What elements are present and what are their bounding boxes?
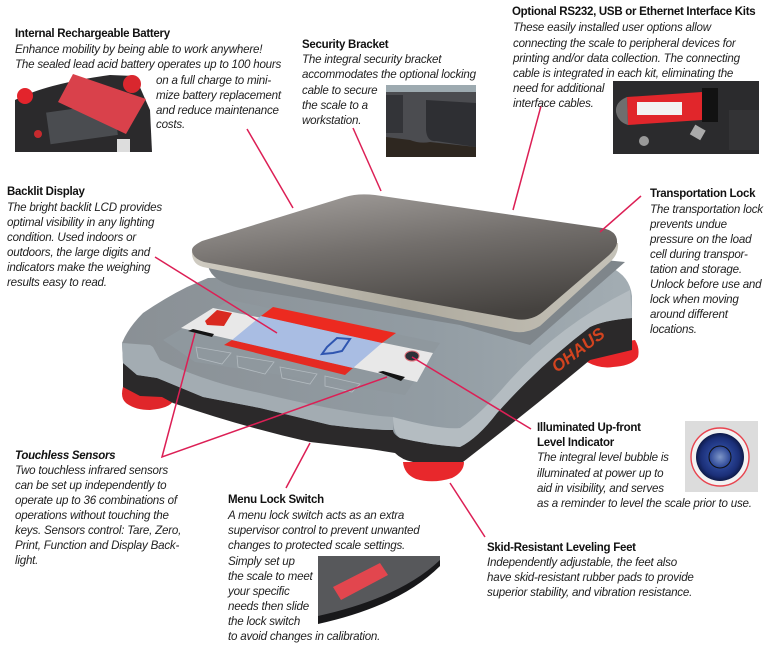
key outlines	[196, 347, 360, 392]
text: interface kits: These easily installed user options allow	[513, 21, 712, 34]
text: touchless sensors: can be set up independently to	[15, 479, 167, 492]
text: battery: The sealed lead acid battery operates up to 100 hours	[15, 58, 282, 71]
text: battery: costs.	[156, 118, 185, 131]
black base	[123, 310, 632, 462]
text: backlit display: The bright backlit LCD provides	[7, 201, 162, 214]
text: battery	[15, 43, 282, 131]
text: leveling feet	[487, 556, 694, 599]
text: transportation lock	[649, 203, 764, 336]
text: battery: on a full charge to mini-	[156, 74, 271, 87]
touch sensor right	[378, 371, 405, 381]
scale foot: front	[403, 462, 464, 481]
panel: menu lock switch	[227, 494, 440, 643]
panel: level indicator	[537, 421, 758, 510]
text: transportation lock: around different	[650, 308, 729, 321]
panel: interface kits	[512, 6, 759, 154]
text: menu lock switch: to avoid changes in calibration.	[228, 630, 380, 643]
panel: battery	[15, 28, 282, 152]
text: menu lock switch	[227, 509, 420, 643]
text: transportation lock: tation and storage.	[650, 263, 742, 276]
scale foot: left	[122, 385, 173, 410]
text: transportation lock: prevents undue	[649, 218, 728, 231]
Ohaus logo	[205, 310, 232, 326]
text: battery: Enhance mobility by being able to work anywhere!	[15, 43, 263, 56]
text: menu lock switch: supervisor control to prevent unwanted	[228, 524, 420, 537]
text: security bracket	[302, 53, 477, 127]
text: level indicator: aid in visibility, and serves	[537, 482, 664, 495]
heading: security bracket: Security Bracket	[302, 39, 389, 51]
recessed front panel	[163, 300, 440, 395]
text: touchless sensors: keys. Sensors control: Tare, Zero,	[15, 524, 181, 537]
text: backlit display: results easy to read.	[7, 276, 107, 289]
panel: transportation lock	[649, 188, 764, 336]
heading: backlit display: Backlit Display	[7, 186, 85, 198]
text: touchless sensors: operate up to 36 combinations of	[15, 494, 179, 507]
panel: touchless sensors	[15, 450, 181, 567]
text: battery: mize battery replacement	[156, 89, 282, 102]
text: backlit display: condition. Used indoors or	[7, 231, 137, 244]
text: interface kits: printing and/or data collection. The connecting	[512, 52, 741, 65]
panel: security bracket	[302, 39, 477, 157]
photo: battery compartment	[15, 74, 152, 152]
text: touchless sensors: light.	[15, 554, 38, 567]
OHAUS brand: OHAUS	[548, 324, 609, 376]
photo: USB kit	[613, 81, 759, 154]
text: leveling feet: superior stability, and vibration resistance.	[487, 586, 692, 599]
grey body highlight	[393, 290, 632, 447]
heading: battery: Internal Rechargeable Battery	[15, 28, 171, 40]
panel: backlit display	[7, 186, 162, 289]
text: transportation lock: Unlock before use and	[650, 278, 762, 291]
text: transportation lock: cell during transpor-	[650, 248, 748, 261]
heading: transportation lock: Transportation Lock	[650, 188, 756, 200]
text: transportation lock: lock when moving	[650, 293, 739, 306]
LCD red header	[261, 307, 396, 343]
text: security bracket: the scale to a	[302, 99, 369, 112]
text: menu lock switch: the scale to meet	[228, 570, 314, 583]
text: security bracket: workstation.	[302, 114, 361, 127]
heading: touchless sensors: Touchless Sensors	[15, 450, 115, 462]
text: interface kits: connecting the scale to peripheral devices for	[513, 37, 737, 50]
panel: leveling feet	[487, 542, 694, 599]
text: leveling feet: Independently adjustable, the feet also	[487, 556, 678, 569]
heading: menu lock switch: Menu Lock Switch	[228, 494, 324, 506]
text: menu lock switch: the lock switch	[228, 615, 300, 628]
level indicator	[405, 351, 419, 361]
heading: leveling feet: Skid-Resistant Leveling Feet	[487, 542, 636, 554]
photo: bracket	[386, 85, 476, 157]
LCD screen	[232, 316, 382, 368]
text: menu lock switch: your specific	[227, 585, 290, 598]
grey body front band	[122, 343, 393, 430]
text: security bracket: The integral security bracket	[302, 53, 442, 66]
heading: level indicator second line: Level Indicator	[537, 437, 615, 449]
platform lip	[192, 243, 618, 332]
text: interface kits: need for additional	[513, 82, 605, 95]
text: menu lock switch: A menu lock switch acts as an extra	[227, 509, 405, 522]
text: touchless sensors: Two touchless infrared sensors	[15, 464, 168, 477]
grey body	[122, 267, 632, 447]
text: backlit display: outdoors, the large digits and	[7, 246, 151, 259]
text: interface kits	[512, 21, 741, 110]
text: menu lock switch: needs then slide	[228, 600, 310, 613]
heading: level indicator: Illuminated Up-front	[537, 422, 641, 434]
text: level indicator	[537, 451, 752, 510]
text: battery: and reduce maintenance	[156, 104, 280, 117]
text: menu lock switch: Simply set up	[228, 555, 296, 568]
scale foot: back right	[587, 340, 639, 367]
text: touchless sensors: operations without touching the	[15, 509, 169, 522]
text: transportation lock: locations.	[650, 323, 697, 336]
text: leveling feet: have skid-resistant rubber pads to provide	[487, 571, 694, 584]
text: level indicator: illuminated at power up to	[537, 467, 664, 480]
text: backlit display: indicators make the weighing	[7, 261, 151, 274]
heading: interface kits: Optional RS232, USB or Ethernet Interface Kits	[512, 6, 755, 18]
photo: level bubble	[685, 421, 758, 492]
text: backlit display: optimal visibility in any lighting	[7, 216, 155, 229]
text: interface kits: cable is integrated in each kit, eliminating the	[513, 67, 734, 80]
text: transportation lock: The transportation lock	[650, 203, 764, 216]
photo: lock switch	[318, 556, 440, 624]
text: security bracket: cable to secure	[302, 84, 378, 97]
text: transportation lock: pressure on the load	[649, 233, 752, 246]
shadow under platform	[208, 240, 625, 345]
illustration: Ohaus Navigator scale	[122, 194, 639, 481]
text: security bracket: accommodates the optional locking	[302, 68, 477, 81]
text: touchless sensors: Print, Function and Display Back-	[15, 539, 180, 552]
callout lines	[155, 106, 641, 537]
LCD digit	[322, 338, 350, 354]
platform top	[192, 194, 617, 320]
text: touchless sensors	[15, 464, 181, 567]
text: menu lock switch: changes to protected scale settings.	[228, 539, 405, 552]
LCD red footer	[224, 340, 353, 375]
touch sensor left	[188, 329, 214, 337]
text: backlit display	[7, 201, 162, 289]
white panel	[181, 308, 433, 382]
text: level indicator: as a reminder to level the scale prior to use.	[537, 497, 752, 510]
text: interface kits: interface cables.	[513, 97, 594, 110]
text: level indicator: The integral level bubble is	[537, 451, 669, 464]
